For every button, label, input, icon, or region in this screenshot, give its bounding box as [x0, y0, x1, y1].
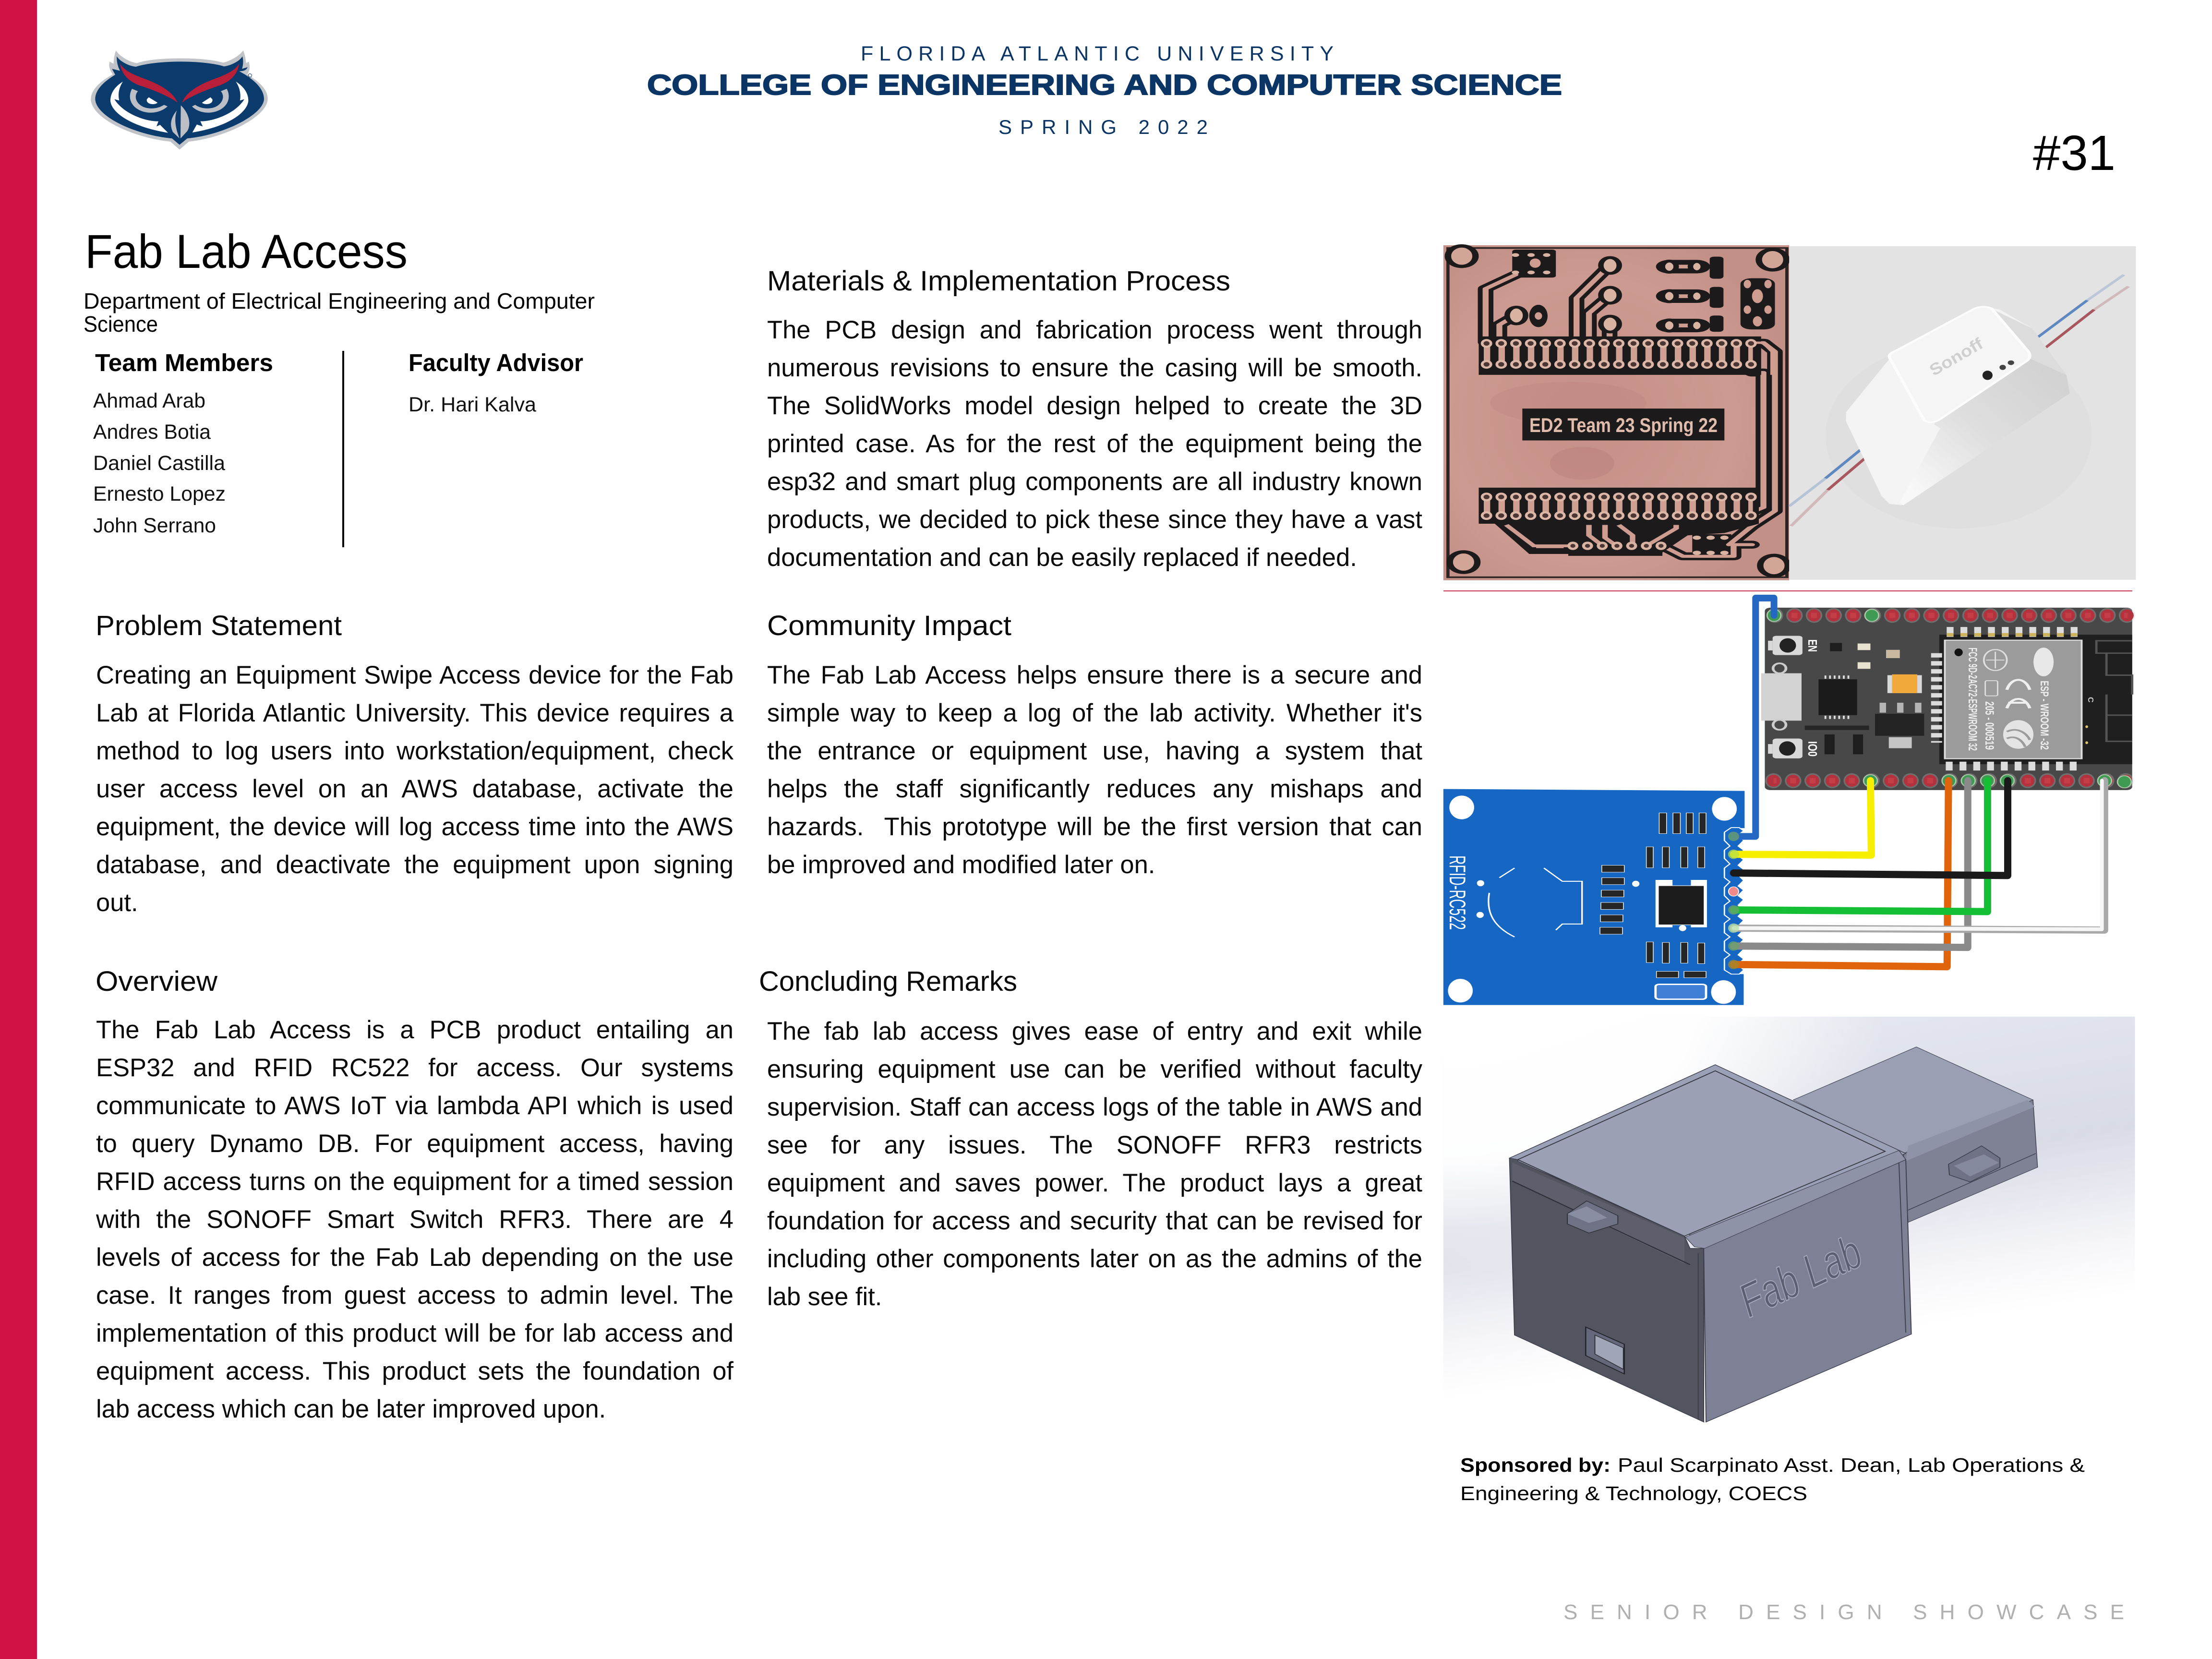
- text block: community impact: the entrance or equipment use, having a system that: [767, 737, 1422, 765]
- text block: community impact: simple way to keep a log of the lab activity. Whether it's: [767, 699, 1422, 727]
- image: SONOFF smart switch: [1789, 246, 2136, 580]
- team members: Andres Botia: [93, 421, 211, 444]
- sponsor credit: Sponsored by:: [1460, 1454, 1611, 1476]
- faculty advisor: Faculty Advisor: [409, 349, 583, 376]
- text block: materials and implementation: [767, 316, 1422, 572]
- board labels: EN: [1805, 639, 1820, 652]
- text block: community impact: [767, 661, 1422, 879]
- label: ED2 team etching: ED2 Team 23 Spring 22: [1529, 414, 1718, 436]
- text block: overview: lab access which can be later improved upon.: [96, 1395, 606, 1423]
- text block: concluding remarks: see for any issues. The SONOFF RFR3 restricts: [767, 1131, 1422, 1159]
- text block: overview: case. It ranges from guest access to admin level. The: [96, 1281, 733, 1310]
- text block: materials and implementation: numerous revisions to ensure the casing will be smooth.: [767, 354, 1422, 382]
- heading: problem statement: Problem Statement: [96, 610, 342, 641]
- text block: community impact: be improved and modified later on.: [767, 851, 1155, 879]
- text block: overview: ESP32 and RFID RC522 for access. Our systems: [96, 1054, 733, 1082]
- text block: problem statement: Lab at Florida Atlantic University. This device requires a: [96, 699, 733, 727]
- text block: overview: communicate to AWS IoT via lambda API which is used: [96, 1092, 733, 1120]
- diagram: ESP32 and RFID wiring: [1443, 598, 2132, 1005]
- text block: community impact: hazards. This prototype will be the first version that can: [767, 813, 1422, 841]
- text block: problem statement: Creating an Equipment Swipe Access device for the Fab: [96, 661, 733, 689]
- text block: concluding remarks: The fab lab access gives ease of entry and exit while: [767, 1017, 1422, 1046]
- text block: concluding remarks: ensuring equipment use can be verified without faculty: [767, 1055, 1422, 1083]
- text block: materials and implementation: products, we decided to pick these since they have a vast: [767, 505, 1422, 534]
- text block: problem statement: [96, 661, 733, 917]
- heading: overview: Overview: [96, 966, 218, 997]
- text block: problem statement: user access level on an AWS database, activate the: [96, 775, 733, 803]
- header: university and college: [647, 42, 1562, 138]
- team members: Ahmad Arab: [93, 389, 205, 412]
- faculty advisor: Dr. Hari Kalva: [409, 393, 536, 416]
- board labels: IO0: [1805, 741, 1820, 757]
- board labels: [1445, 639, 2094, 930]
- icon: FAU owl logo: [91, 50, 268, 150]
- heading: community impact: Community Impact: [767, 610, 1011, 641]
- text block: materials and implementation: documentation and can be easily replaced if needed.: [767, 543, 1357, 572]
- text block: materials and implementation: esp32 and smart plug components are all industry known: [767, 468, 1422, 496]
- title: Fab Lab Access: [85, 225, 408, 278]
- text block: problem statement: out.: [96, 889, 138, 917]
- text block: concluding remarks: lab see fit.: [767, 1283, 882, 1311]
- footer: SENIOR DESIGN SHOWCASE: [1563, 1600, 2124, 1624]
- text block: problem statement: equipment, the device will log access time into the AWS: [96, 813, 733, 841]
- text block: overview: with the SONOFF Smart Switch RFR3. There are 4: [96, 1205, 733, 1234]
- embossed text: Fab Lab: [1731, 1225, 1870, 1327]
- text block: materials and implementation: The PCB design and fabrication process went through: [767, 316, 1422, 344]
- heading: materials: Materials & Implementation Process: [767, 265, 1230, 297]
- text block: problem statement: database, and deactivate the equipment upon signing: [96, 851, 733, 879]
- text block: overview: [96, 1016, 733, 1423]
- ESP32 board: [1761, 608, 2132, 790]
- text block: overview: equipment access. This product sets the foundation of: [96, 1357, 733, 1385]
- board labels: C: [2086, 697, 2094, 703]
- text block: problem statement: method to log users into workstation/equipment, check: [96, 737, 733, 765]
- board labels: RFID-RC522: [1445, 855, 1470, 930]
- text block: overview: to query Dynamo DB. For equipment access, having: [96, 1130, 733, 1158]
- text block: concluding remarks: foundation for access and security that can be revised for: [767, 1207, 1422, 1235]
- text block: overview: levels of access for the Fab Lab depending on the use: [96, 1243, 733, 1272]
- text block: concluding remarks: supervision. Staff can access logs of the table in AWS and: [767, 1093, 1422, 1121]
- text block: overview: RFID access turns on the equipment for a timed session: [96, 1167, 733, 1196]
- sponsor credit: Paul Scarpinato Asst. Dean, Lab Operations &: [1618, 1454, 2085, 1476]
- image: etched PCB: [1443, 245, 1789, 580]
- faculty advisor: [409, 349, 583, 416]
- text block: concluding remarks: equipment and saves power. The product lays a great: [767, 1169, 1422, 1197]
- text block: community impact: helps the staff significantly reduces any mishaps and: [767, 775, 1422, 803]
- board labels: ESP - WROOM -32: [2038, 681, 2051, 750]
- image: 3D printed case render: [1443, 1017, 2135, 1429]
- text block: concluding remarks: including other components later on as the admins of the: [767, 1245, 1422, 1273]
- text block: materials and implementation: The SolidWorks model design helped to create the 3D: [767, 392, 1422, 420]
- text block: materials and implementation: printed case. As for the rest of the equipment being the: [767, 430, 1422, 458]
- RFID-RC522 board: [1443, 789, 1744, 1005]
- team members: John Serrano: [93, 514, 216, 537]
- team members: Ernesto Lopez: [93, 482, 226, 505]
- text block: community impact: The Fab Lab Access helps ensure there is a secure and: [767, 661, 1422, 689]
- board labels: 205 - 000519: [1983, 701, 1996, 750]
- department: [84, 289, 595, 337]
- header: university and college: COLLEGE OF ENGINEERING AND COMPUTER SCIENCE: [647, 69, 1562, 101]
- text block: concluding remarks: [767, 1017, 1422, 1311]
- department: Department of Electrical Engineering and Computer: [84, 289, 595, 313]
- text block: overview: The Fab Lab Access is a PCB product entailing an: [96, 1016, 733, 1044]
- label: Sonoff brand: Sonoff: [1926, 335, 1986, 380]
- wires: [1733, 598, 2104, 967]
- heading: concluding remarks: Concluding Remarks: [759, 966, 1017, 997]
- red rule: [1443, 590, 2132, 591]
- team members: Team Members: [95, 349, 273, 376]
- red side bar: [0, 0, 37, 1659]
- header: university and college: SPRING 2022: [998, 116, 1208, 138]
- team members: [93, 349, 273, 537]
- sponsor credit: Engineering & Technology, COECS: [1460, 1482, 1807, 1504]
- team members: Daniel Castilla: [93, 452, 225, 475]
- poster number: #31: [2033, 125, 2116, 180]
- divider between team and advisor: [342, 351, 344, 547]
- header: university and college: FLORIDA ATLANTIC UNIVERSITY: [861, 42, 1334, 65]
- text block: overview: implementation of this product will be for lab access and: [96, 1319, 733, 1347]
- sponsor credit: [1460, 1454, 2085, 1504]
- board labels: FCC 9D-2AC72-ESPWROOM 32: [1966, 648, 1979, 751]
- department: Science: [84, 312, 158, 337]
